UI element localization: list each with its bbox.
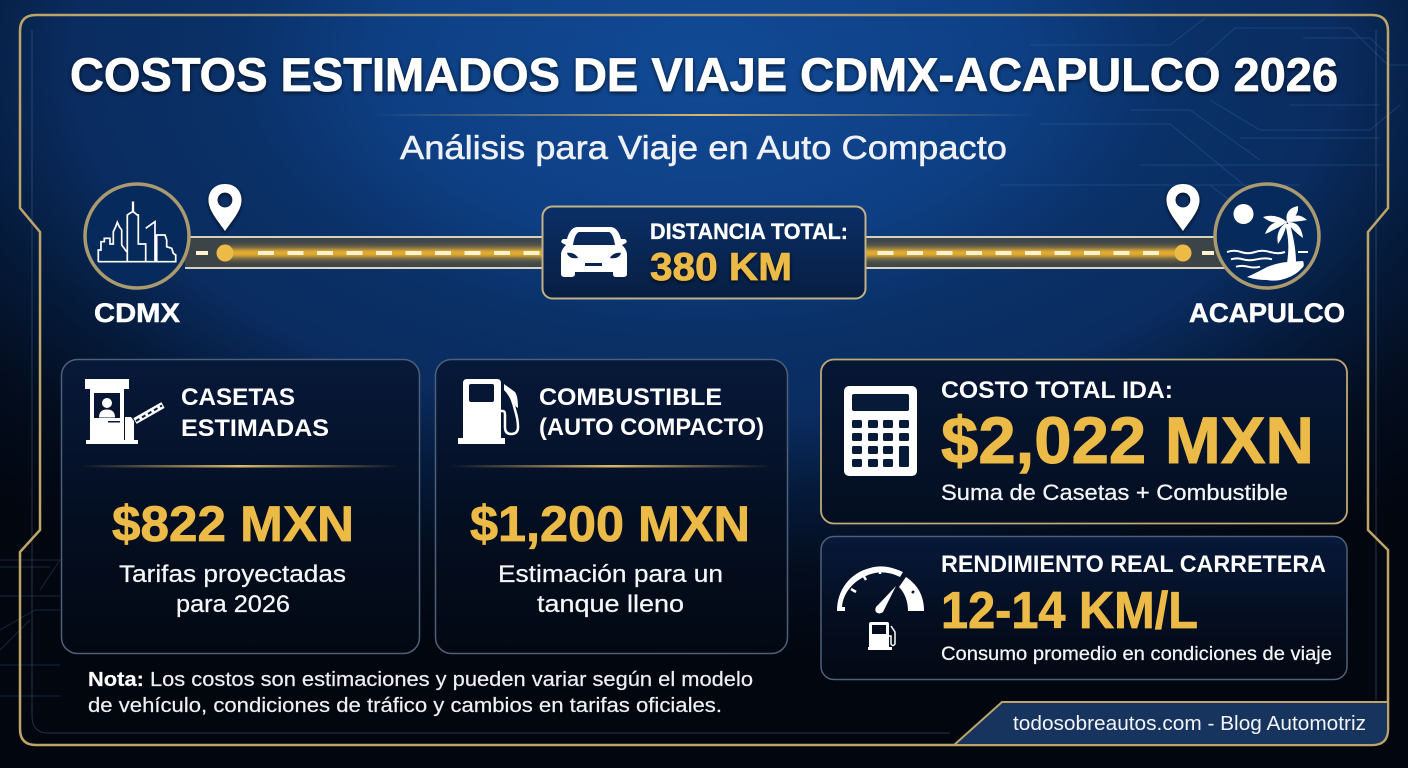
- title divider: [370, 114, 1038, 116]
- note: de vehículo, condiciones de tráfico y cambios en tarifas oficiales.: [88, 695, 722, 717]
- panel heading: [181, 384, 329, 442]
- icon: CDMX skyline: [85, 184, 189, 288]
- note: [88, 669, 753, 717]
- description: tanque lleno: [537, 591, 684, 618]
- heading: RENDIMIENTO REAL CARRETERA: [941, 551, 1326, 578]
- panel heading: COMBUSTIBLE: [539, 384, 722, 411]
- description: Tarifas proyectadas: [119, 561, 346, 588]
- value: $1,200 MXN: [470, 496, 750, 552]
- icon: car: [561, 227, 627, 277]
- distance box: [542, 206, 866, 298]
- panel: costo total: [821, 360, 1347, 524]
- panel: combustible: [436, 360, 788, 654]
- label: ACAPULCO: ACAPULCO: [1189, 298, 1345, 328]
- note: Nota: Los costos son estimaciones y pueden variar según el modelo: [88, 669, 753, 691]
- icon: toll booth: [85, 379, 163, 444]
- icon: fuel pump: [458, 379, 518, 444]
- icon: end location pin: [1166, 184, 1200, 231]
- distance label: DISTANCIA TOTAL:: [650, 219, 848, 244]
- route road: [185, 236, 1225, 269]
- description: [119, 561, 346, 618]
- panel: casetas: [62, 360, 420, 654]
- description: Estimación para un: [498, 561, 723, 588]
- icon: start location pin: [208, 184, 242, 231]
- icon: calculator: [844, 386, 917, 476]
- description: [498, 561, 723, 618]
- panel heading: ESTIMADAS: [181, 415, 329, 442]
- footer tab: [954, 702, 1388, 745]
- value: $2,022 MXN: [941, 403, 1314, 477]
- panel heading: (AUTO COMPACTO): [539, 414, 764, 441]
- title: COSTOS ESTIMADOS DE VIAJE CDMX-ACAPULCO 2026: [70, 48, 1338, 101]
- description: Suma de Casetas + Combustible: [941, 480, 1288, 505]
- description: para 2026: [176, 591, 290, 618]
- heading: COSTO TOTAL IDA:: [941, 377, 1173, 404]
- value: 12-14 KM/L: [941, 582, 1198, 640]
- route end dot: [1174, 244, 1192, 262]
- route start dot: [216, 244, 234, 262]
- footer text: todosobreautos.com - Blog Automotriz: [1013, 713, 1366, 735]
- subtitle: Análisis para Viaje en Auto Compacto: [400, 129, 1007, 166]
- icon: Acapulco beach: [1215, 184, 1319, 288]
- description: Consumo promedio en condiciones de viaje: [941, 644, 1332, 665]
- icon: fuel gauge: [837, 566, 924, 650]
- panel heading: CASETAS: [181, 384, 295, 411]
- distance value: 380 KM: [650, 246, 792, 289]
- panel heading: [539, 384, 764, 441]
- value: $822 MXN: [112, 496, 354, 552]
- panel: rendimiento: [821, 536, 1347, 680]
- label: CDMX: CDMX: [94, 298, 180, 328]
